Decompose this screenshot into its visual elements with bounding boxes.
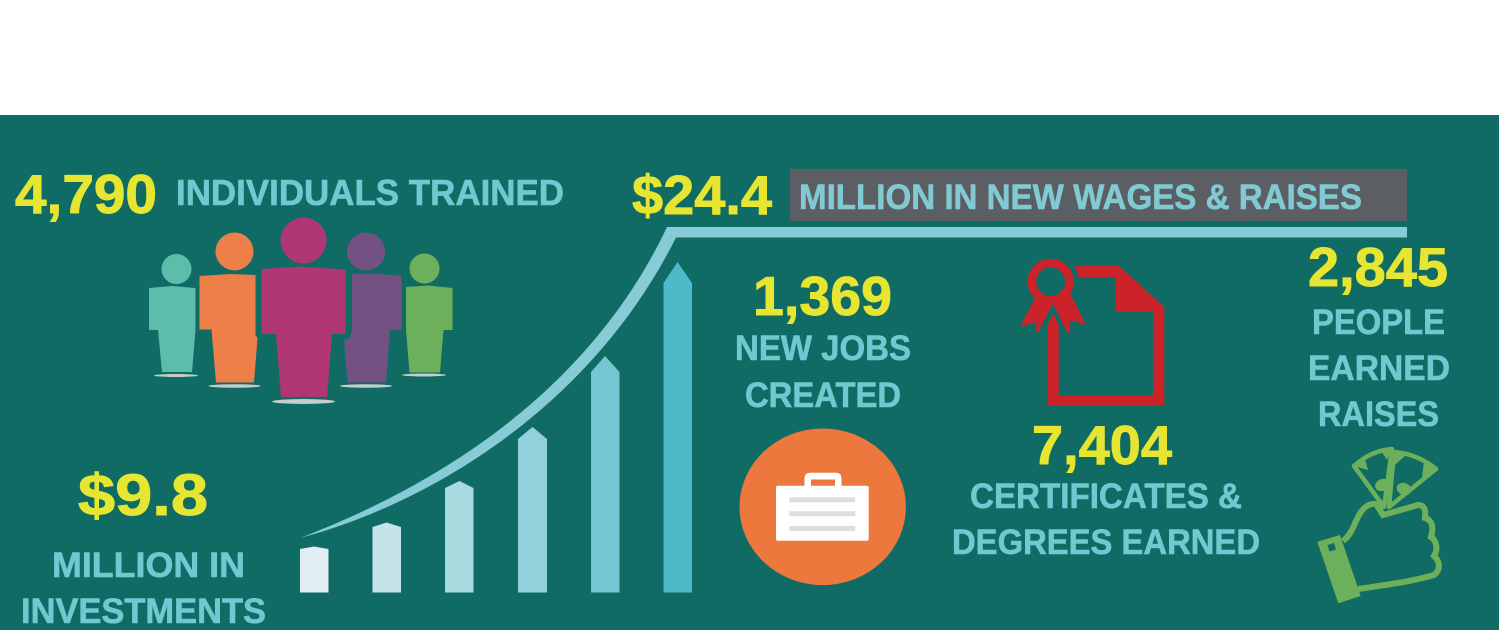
person: magenta — [262, 218, 346, 404]
stat: new wages and raises: $24.4 — [632, 164, 772, 226]
icon: group of people — [149, 218, 452, 404]
stat: certificates and degrees: 7,404 — [1032, 414, 1172, 476]
stat: people earned raises — [1308, 236, 1450, 434]
stat: individuals trained — [15, 163, 564, 225]
stat: certificates and degrees — [952, 414, 1260, 562]
icon: certificate with ribbon — [1020, 263, 1164, 406]
stat: people earned raises: RAISES — [1318, 395, 1439, 434]
person: teal — [149, 254, 198, 377]
bar 1 — [300, 546, 328, 592]
stat: people earned raises: 2,845 — [1308, 236, 1448, 298]
stat: new jobs created: CREATED — [745, 376, 901, 415]
stat: people earned raises: EARNED — [1308, 349, 1450, 388]
stat: new wages and raises: MILLION IN NEW WAGES & RAISES — [799, 178, 1362, 217]
stat: new jobs created: 1,369 — [753, 265, 892, 327]
hand outline — [1343, 504, 1439, 589]
stat: certificates and degrees: DEGREES EARNED — [952, 523, 1260, 562]
growth curve — [300, 227, 1407, 538]
stat: investments: MILLION IN — [52, 546, 245, 585]
bill details — [1354, 448, 1436, 497]
person: green — [402, 254, 452, 376]
person: purple — [340, 232, 402, 388]
icon: briefcase in orange circle — [740, 428, 906, 585]
bills — [1354, 449, 1436, 507]
bar 5 — [591, 356, 620, 592]
stat: new wages and raises — [632, 164, 1407, 226]
icon: hand holding money — [1317, 448, 1439, 603]
stat: people earned raises: PEOPLE — [1312, 303, 1445, 342]
stat: individuals trained: INDIVIDUALS TRAINED — [176, 172, 564, 213]
stat: individuals trained: 4,790 — [15, 163, 157, 225]
bar 6 — [664, 262, 692, 592]
bar chart: rising arrows — [300, 262, 692, 592]
stat: investments — [21, 463, 266, 630]
bar 3 — [445, 481, 474, 592]
person: orange — [200, 232, 260, 388]
stat: new jobs created — [735, 265, 911, 415]
bar 4 — [518, 427, 547, 592]
stat: new jobs created: NEW JOBS — [735, 329, 911, 368]
stat: investments: $9.8 — [78, 463, 208, 528]
stat: certificates and degrees: CERTIFICATES & — [970, 477, 1242, 516]
bar 2 — [372, 522, 401, 592]
stat: investments: INVESTMENTS — [21, 592, 266, 630]
cuff — [1317, 535, 1361, 603]
